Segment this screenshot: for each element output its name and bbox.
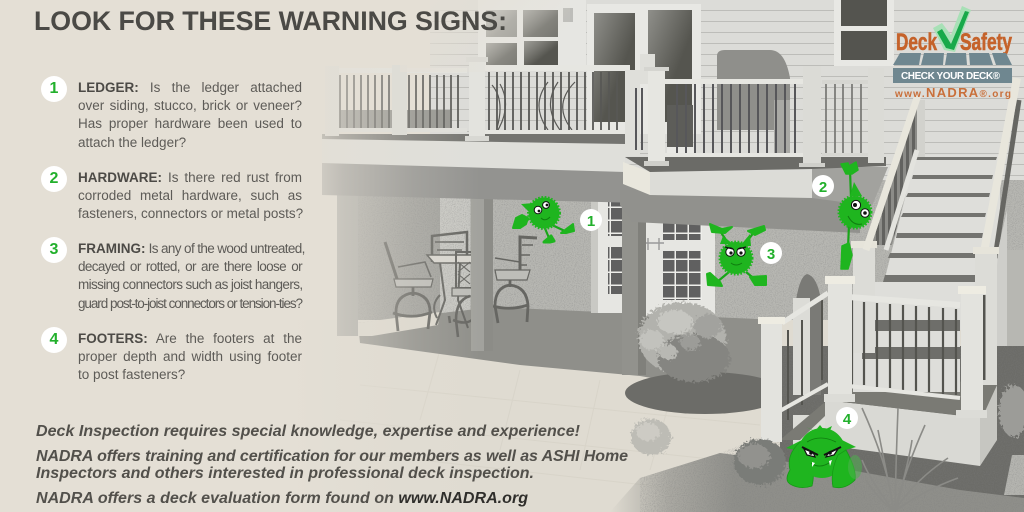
gravel texture (640, 438, 1024, 512)
solid beige panel (0, 0, 292, 512)
tread shadows (883, 157, 997, 282)
item 1: ledger: LEDGER: Is the ledger attached (78, 80, 302, 95)
left stair rail (866, 95, 918, 250)
landing balusters (788, 300, 956, 420)
item 2: hardware (78, 170, 303, 221)
right mulch bed (780, 346, 1024, 512)
patio furniture (385, 232, 537, 337)
patio paving (290, 320, 1024, 512)
number badge 4 (836, 407, 858, 429)
logo word Deck: Deck (896, 29, 937, 56)
left mulch bed (625, 372, 785, 414)
patio doors (591, 200, 715, 316)
number badge 3: 3 (767, 246, 775, 263)
item 4: footers: FOOTERS: Are the footers at the (78, 331, 302, 346)
base box (825, 400, 980, 466)
left fade to beige (290, 0, 480, 512)
item 4: footers (78, 331, 302, 382)
badge 2 (41, 166, 67, 192)
footer statement 1: Deck Inspection requires special knowledge, expertise and experience! (36, 423, 581, 440)
stucco wall (340, 180, 1024, 350)
ornamental grass (862, 408, 958, 510)
shrub beside landing (734, 439, 786, 485)
number badge 1 (580, 209, 602, 231)
item 4: footers: to post fasteners? (78, 367, 185, 382)
landing floor (825, 372, 997, 418)
number badge 2 (812, 175, 834, 197)
front posts (828, 278, 852, 400)
posts (325, 66, 339, 136)
right pavers (1004, 455, 1024, 495)
footer statement 3: NADRA offers a deck evaluation form found on www.NADRA.org (36, 490, 528, 507)
back stair treads (853, 282, 960, 392)
item 3: framing: decayed or rotted, or are there loose or (78, 259, 302, 274)
back posts (853, 243, 875, 353)
dark deck behind railing (340, 110, 450, 130)
logo: Deck Safety, Check Your Deck (893, 6, 1012, 100)
inner stringer (886, 150, 917, 250)
monster 2: hardware (839, 162, 871, 269)
item 1: ledger: attach the ledger? (78, 135, 186, 150)
item 3: framing (78, 241, 305, 311)
balusters (340, 72, 617, 130)
balusters (636, 83, 861, 155)
lower deck railing (325, 54, 655, 156)
hand rails (337, 68, 467, 73)
main stairs (866, 78, 1024, 375)
badge 3 (41, 237, 67, 263)
lower deck floor edge (322, 134, 625, 144)
number badge 3 (760, 242, 782, 264)
item 2: hardware: corroded metal hardware, such as (78, 188, 302, 203)
support pillars (337, 190, 646, 375)
badge 1: 1 (50, 80, 58, 97)
large shrub (638, 302, 730, 382)
right stair rail and balusters (995, 100, 1019, 258)
monster 3: framing (707, 224, 766, 286)
item 4: footers: proper depth and width using footer (78, 349, 302, 364)
upper bay fascia (623, 157, 888, 206)
posts (648, 67, 665, 163)
logo awning (893, 53, 1012, 65)
top fade over windows (400, 0, 570, 72)
badge 2: 2 (50, 170, 58, 187)
stair baluster hatch (873, 93, 917, 245)
item 1: ledger: over siding, stucco, brick or veneer? (78, 98, 302, 113)
item 2: hardware: HARDWARE: Is there red rust from (78, 170, 302, 185)
logo web address: www.NADRA®.org (894, 85, 1011, 100)
house wall with siding (340, 0, 1024, 350)
logo banner (893, 68, 1012, 83)
left chair (385, 242, 433, 331)
number badge 2: 2 (819, 179, 827, 196)
faint shrub on pavers (631, 419, 671, 455)
footer statement 2: Inspectors and others interested in professional deck inspection. (36, 465, 534, 482)
upper deck railing (636, 66, 884, 167)
landing rails (848, 297, 960, 305)
front chair (449, 252, 472, 337)
item 2: hardware: fasteners, connectors or metal posts? (78, 206, 303, 221)
footer statement 2 (36, 448, 628, 482)
badge 1 (41, 76, 67, 102)
covered patio floor shadow (358, 307, 780, 400)
number badge 4: 4 (843, 411, 852, 428)
gravel ground (610, 453, 1024, 512)
rails (663, 79, 805, 84)
far chair (432, 232, 467, 262)
lower deck fascia (322, 138, 625, 172)
footer statement 2: NADRA offers training and certification for our members as well as ASHI Home (36, 448, 628, 465)
lower stair landing (758, 241, 999, 466)
logo check mark (933, 6, 971, 52)
number badge 1: 1 (587, 213, 595, 230)
table (427, 255, 472, 328)
item 3: framing: guard post-to-joist connectors or tension-ties? (78, 296, 302, 311)
item 3: framing: FRAMING: Is any of the wood untreated, (78, 241, 305, 256)
grill (667, 50, 790, 160)
badge 4: 4 (50, 331, 58, 348)
monster 1: ledger (513, 198, 574, 242)
tree behind stair rail (796, 274, 821, 395)
badge 3: 3 (50, 241, 58, 258)
item 3: framing: missing connectors such as joist hangers, (78, 277, 302, 292)
item 1: ledger: Has proper hardware been used to (78, 116, 302, 131)
front stair rail over monster (866, 208, 880, 250)
logo banner text: CHECK YOUR DECK® (901, 71, 1001, 82)
right edge shrub (999, 385, 1024, 437)
deck beams (322, 162, 860, 233)
badge 4 (41, 327, 67, 353)
top right window (834, 0, 894, 66)
monster 4: footers (786, 425, 862, 488)
right chair (493, 237, 537, 323)
sunlit floor patch (358, 312, 440, 336)
main title: LOOK FOR THESE WARNING SIGNS: (34, 6, 507, 36)
upper window and french door (478, 0, 701, 134)
item 1: ledger (78, 80, 302, 150)
